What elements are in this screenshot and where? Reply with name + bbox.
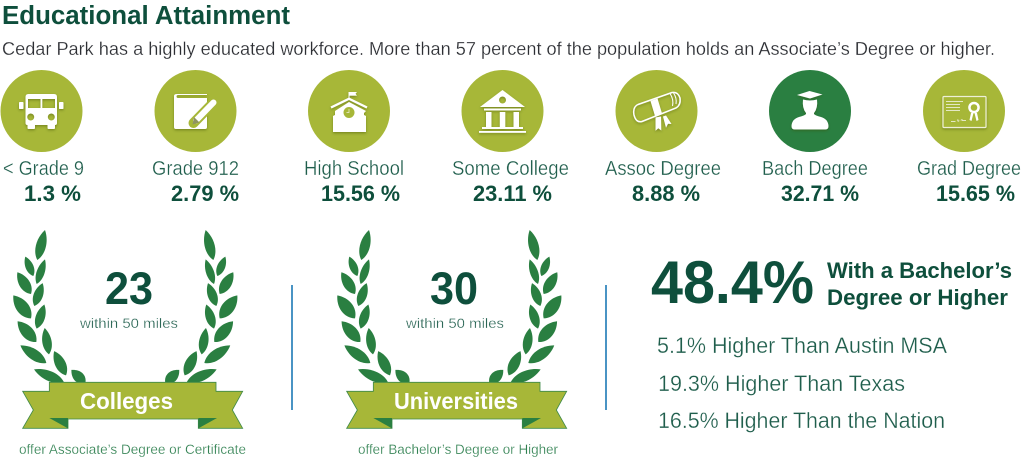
icon: laurel wreath [332,229,566,387]
value: 32.71 % [781,181,859,206]
label: Some College [452,158,569,180]
count: 30 [430,263,478,314]
label: Bach Degree [762,158,868,180]
value: 15.56 % [321,181,400,206]
statistic caption: Degree or Higher [827,285,1008,310]
ribbon banner: Universities [394,388,518,414]
count: 23 [105,263,153,314]
panel: grade 9 to 12 [152,70,239,206]
comparison: Texas: 19.3% Higher Than Texas [658,371,905,396]
panel: less than grade 9 [0,70,84,206]
count caption: within 50 miles [79,315,178,331]
icon: diploma scroll [616,70,698,152]
panel: colleges [8,229,246,457]
statistic caption [827,258,1012,310]
icon: columned building [462,70,544,152]
panel: associate degree [605,70,721,206]
big statistic: 48.4% [651,249,814,316]
note: offer Bachelor’s Degree or Higher [358,442,559,457]
panel: universities [332,229,567,457]
icon: school house [308,70,390,152]
comparison: Austin MSA: 5.1% Higher Than Austin MSA [657,333,947,358]
statistic caption: With a Bachelor’s [827,258,1012,283]
title: Educational Attainment [2,2,291,30]
panel: bachelor's comparison [651,249,1012,433]
ribbon banner: Colleges [80,388,173,414]
comparison: Nation: 16.5% Higher Than the Nation [658,408,945,433]
ribbon banner [347,382,567,428]
icon: notebook and pencil [154,70,236,152]
label: < Grade 9 [3,158,84,180]
icon: school bus [0,70,82,152]
label: Grade 912 [152,158,239,180]
value: 2.79 % [171,181,239,206]
ribbon banner [23,382,243,428]
value: 23.11 % [473,181,552,206]
count caption: within 50 miles [405,315,504,331]
intro text: Cedar Park has a highly educated workforce. More than 57 percent of the population holds an Associate’s Degree or higher. [2,38,995,59]
panel: high school [304,70,404,206]
label: Assoc Degree [605,158,721,180]
icon: graduate [769,70,851,152]
value: 15.65 % [936,181,1015,206]
panel: graduate degree [917,70,1021,206]
label: High School [304,158,404,180]
icon: laurel wreath [8,229,242,387]
icon: certificate [923,70,1005,152]
panel: some college [452,70,569,206]
value: 8.88 % [632,181,700,206]
value: 1.3 % [24,181,81,206]
note: offer Associate’s Degree or Certificate [19,442,246,457]
panel: bachelor degree [762,70,868,206]
